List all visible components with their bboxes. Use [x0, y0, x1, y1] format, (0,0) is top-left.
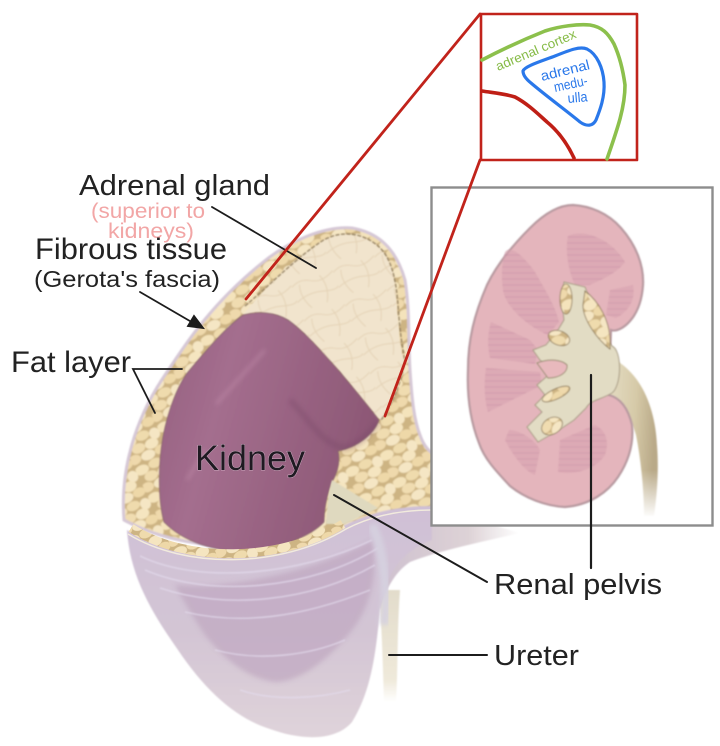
lines: fat layer [133, 369, 182, 413]
medulla label [539, 56, 591, 106]
ureter in cross-section [606, 361, 658, 516]
label: renal pelvis: Renal pelvis [494, 569, 662, 601]
red connector lines [246, 14, 480, 416]
fat rim along opening [131, 524, 343, 554]
fascia edge [128, 510, 432, 560]
kidney highlights [187, 350, 265, 480]
kidney lobe shadow [290, 400, 378, 448]
medulla label: medu- [552, 72, 589, 95]
line: renal pelvis inset [590, 375, 592, 568]
fascia fibres [140, 540, 378, 698]
renal cortex [468, 205, 643, 507]
renal pyramids [485, 234, 634, 475]
renal sinus [527, 282, 620, 442]
label: Gerota's fascia: (Gerota's fascia) [34, 266, 220, 292]
handwritten note: superior to kidneys: kidneys) [108, 220, 194, 243]
red zoom box [481, 14, 637, 160]
label: fat layer: Fat layer [11, 346, 131, 379]
label: ureter: Ureter [494, 640, 579, 672]
fascia vertical sheen [372, 525, 386, 625]
label: fibrous tissue: Fibrous tissue [35, 233, 227, 266]
cortex curve [482, 25, 625, 159]
label: kidney: Kidney [195, 439, 305, 478]
handwritten note: superior to kidneys: (superior to [91, 200, 205, 223]
labels [11, 170, 662, 672]
handwritten note: superior to kidneys [91, 200, 205, 243]
medulla label: adrenal [539, 56, 591, 84]
sinus pale calyx [537, 360, 567, 378]
kidney edge curve [482, 91, 574, 158]
inner fascia shading [175, 540, 374, 682]
cortex label: adrenal cortex [493, 26, 579, 74]
label: adrenal gland: Adrenal gland [79, 170, 270, 202]
ureter below fascia [379, 590, 400, 702]
illustration: opened renal fascia and kidney [123, 228, 520, 737]
line: ureter [389, 654, 487, 656]
lower fascia [127, 506, 432, 737]
sinus fat deposits [538, 284, 610, 438]
medulla loop [523, 48, 604, 125]
renal pelvis stub [326, 480, 378, 524]
ureter fade [640, 470, 662, 518]
inset panel: kidney cross-section [432, 188, 712, 526]
adrenal gland outline [245, 234, 405, 420]
arrow: fibrous tissue [140, 292, 203, 328]
fascia wing toward midline [372, 507, 520, 610]
line: adrenal gland [212, 207, 316, 268]
leader lines [133, 207, 591, 655]
kidney [159, 313, 379, 551]
adrenal gland [243, 234, 405, 420]
zoom callout: adrenal detail [246, 14, 637, 416]
fat layer envelope [123, 228, 436, 547]
medulla label: ulla [567, 88, 588, 106]
line: renal pelvis main [334, 495, 487, 582]
